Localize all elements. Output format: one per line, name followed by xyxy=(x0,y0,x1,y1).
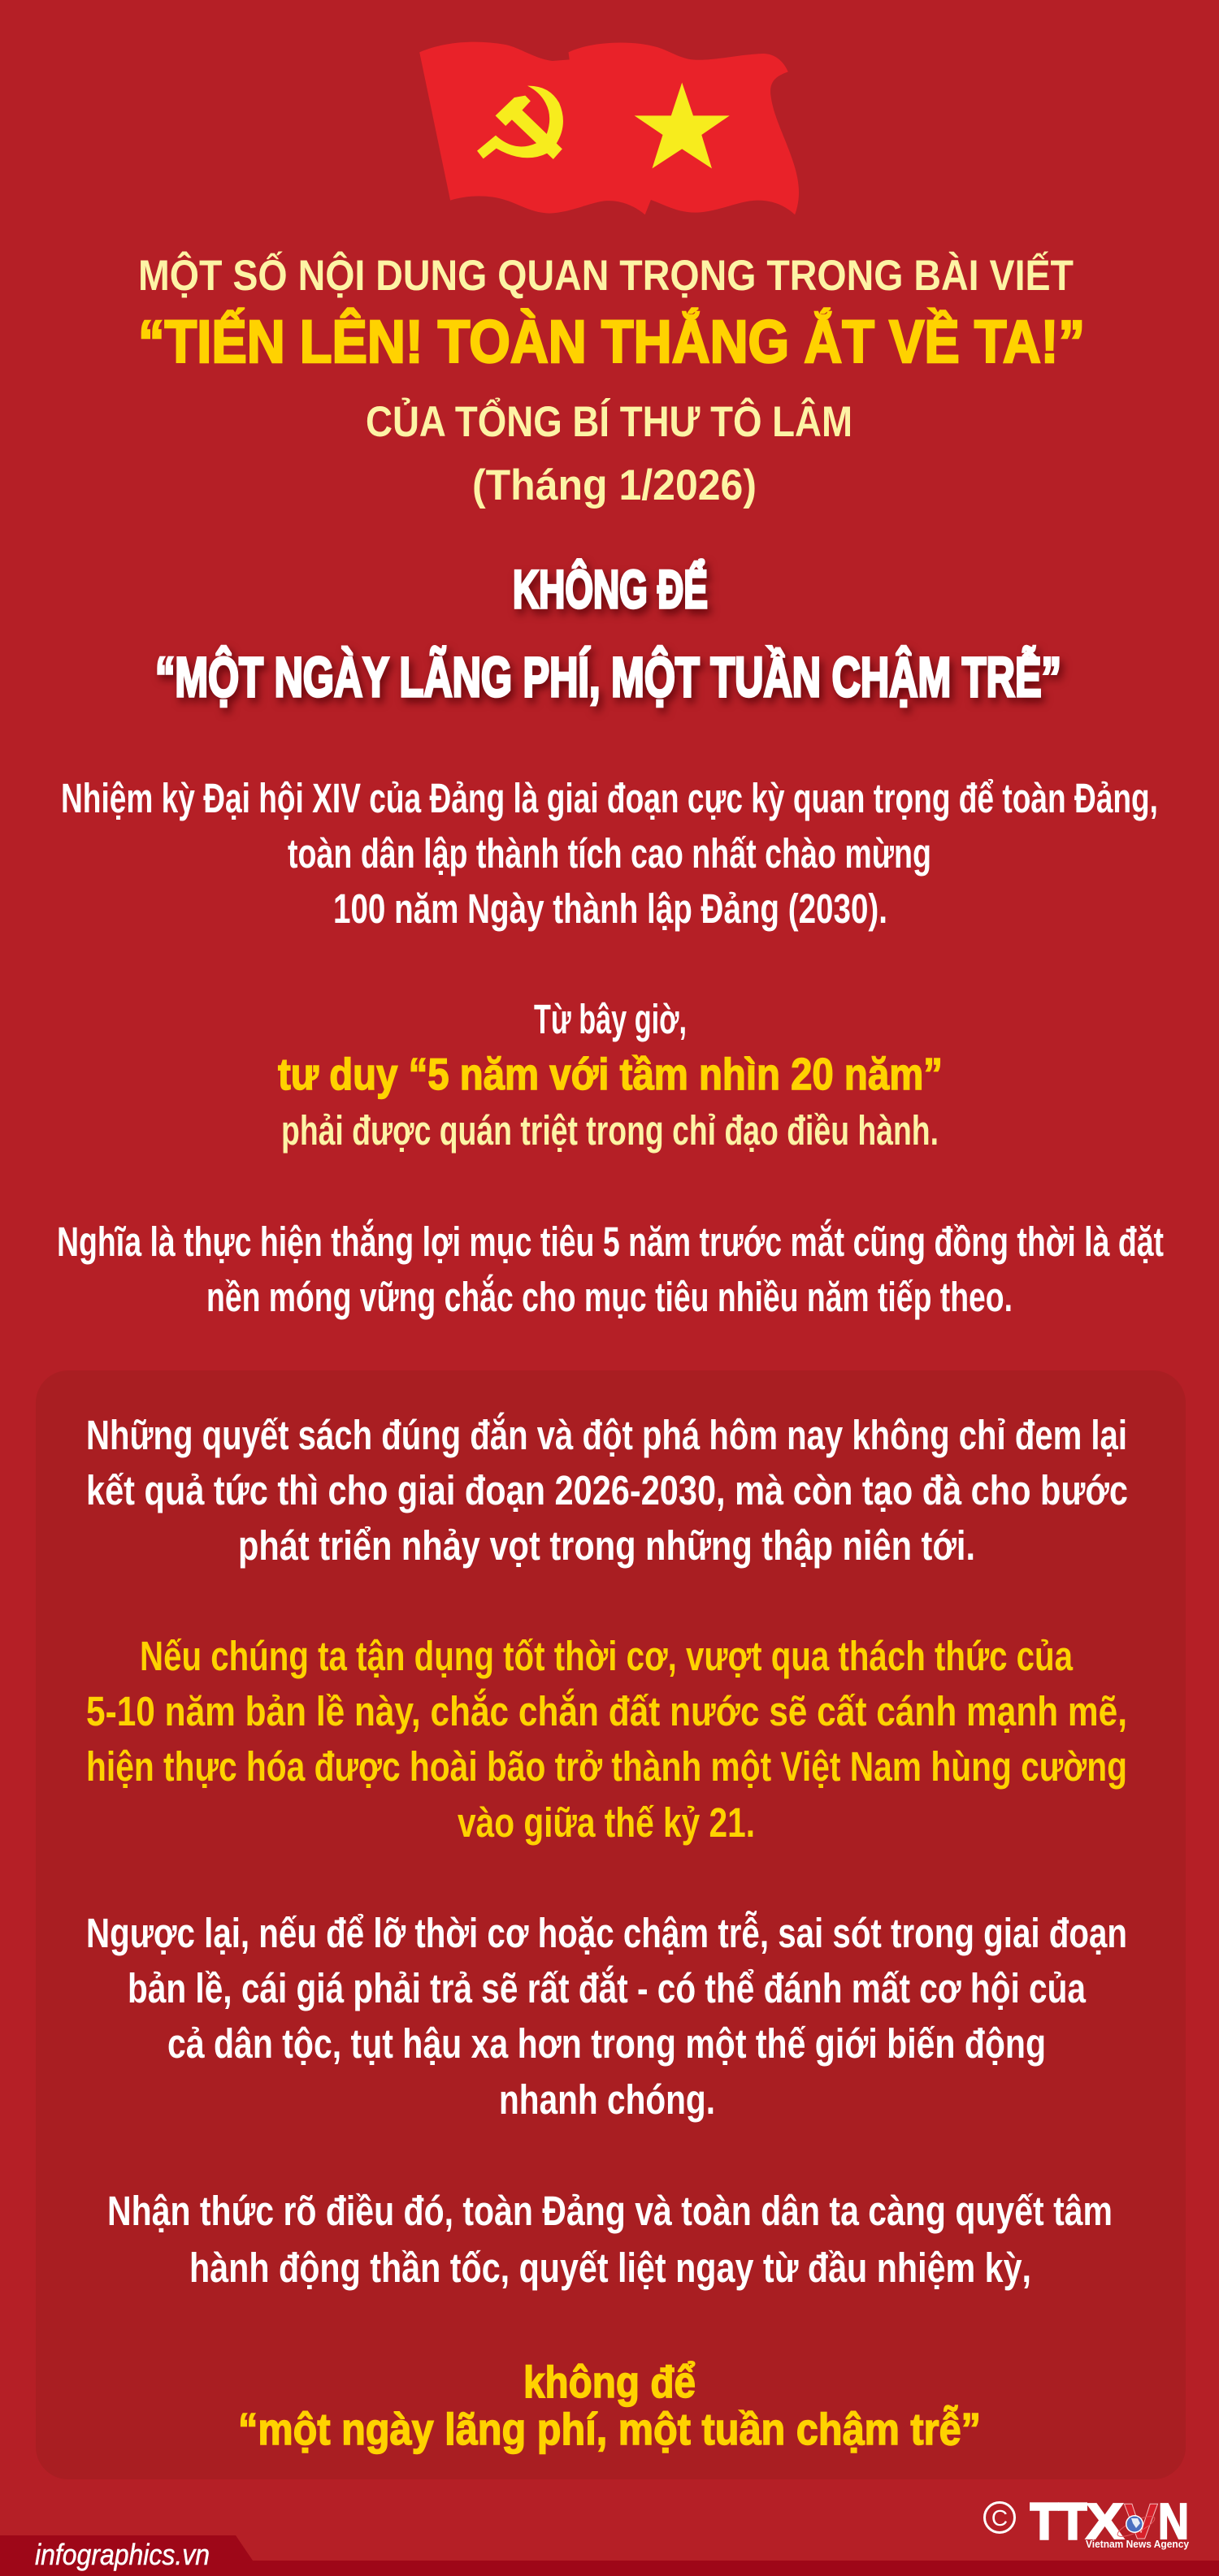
panel text: risk: nhanh chóng. xyxy=(499,2076,715,2123)
title block xyxy=(138,250,1085,509)
icon: yellow star xyxy=(635,83,730,168)
title line: date: (Tháng 1/2026) xyxy=(472,461,757,509)
title line: intro: MỘT SỐ NỘI DUNG QUAN TRỌNG TRONG BÀI VIẾT xyxy=(138,250,1074,300)
footer strip xyxy=(0,2535,1219,2576)
panel text: risk xyxy=(86,1910,1127,2123)
text block: five year thinking xyxy=(278,996,943,1154)
text block: term significance: 100 năm Ngày thành lập Đảng (2030). xyxy=(333,885,887,932)
text block: term significance: toàn dân lập thành tích cao nhất chào mừng xyxy=(288,830,931,877)
panel text: closing slogan xyxy=(238,2357,981,2454)
text block: five year thinking: phải được quán triệt trong chỉ đạo điều hành. xyxy=(281,1107,939,1154)
logo: TTXVN: V xyxy=(1124,2494,1158,2550)
logo: TTXVN: N xyxy=(1158,2494,1189,2550)
panel text: opportunity: vào giữa thế kỷ 21. xyxy=(458,1799,755,1846)
panel text: opportunity xyxy=(86,1633,1127,1846)
footer website label: infographics.vn xyxy=(35,2538,210,2571)
panel text: closing slogan: không để xyxy=(523,2357,696,2407)
logo: TTXVN xyxy=(1030,2494,1190,2550)
copyright symbol: C xyxy=(991,2505,1008,2531)
text block: five year thinking: Từ bây giờ, xyxy=(534,996,687,1042)
icon: party and national flag xyxy=(419,42,799,214)
panel text: decisions xyxy=(86,1411,1128,1569)
panel text: resolve: hành động thần tốc, quyết liệt ngay từ đầu nhiệm kỳ, xyxy=(189,2245,1031,2291)
text block: meaning xyxy=(57,1218,1164,1320)
logo: TTXVN: Vietnam News Agency xyxy=(1086,2538,1190,2550)
panel background xyxy=(36,1370,1186,2479)
icon: globe xyxy=(1115,2513,1157,2540)
text block: five year thinking: tư duy “5 năm với tầm nhìn 20 năm” xyxy=(278,1049,943,1099)
logo: TTXVN: T xyxy=(1030,2494,1058,2550)
logo: TTXVN: T xyxy=(1059,2494,1087,2550)
panel text: resolve xyxy=(107,2188,1113,2291)
panel: decisions xyxy=(36,1370,1186,2479)
main heading xyxy=(155,559,1061,708)
main heading: KHÔNG ĐỂ xyxy=(513,559,708,619)
title line: article name: “TIẾN LÊN! TOÀN THẮNG ẮT VỀ TA!” xyxy=(138,308,1085,375)
panel text: closing slogan: “một ngày lãng phí, một tuần chậm trễ” xyxy=(238,2404,981,2454)
text block: term significance xyxy=(61,775,1158,932)
copyright symbol xyxy=(985,2502,1014,2533)
icon: hammer and sickle xyxy=(477,86,563,159)
title line: author: CỦA TỔNG BÍ THƯ TÔ LÂM xyxy=(366,396,852,446)
panel text: decisions: phát triển nhảy vọt trong những thập niên tới. xyxy=(238,1522,975,1569)
logo: TTXVN: X xyxy=(1086,2494,1124,2550)
